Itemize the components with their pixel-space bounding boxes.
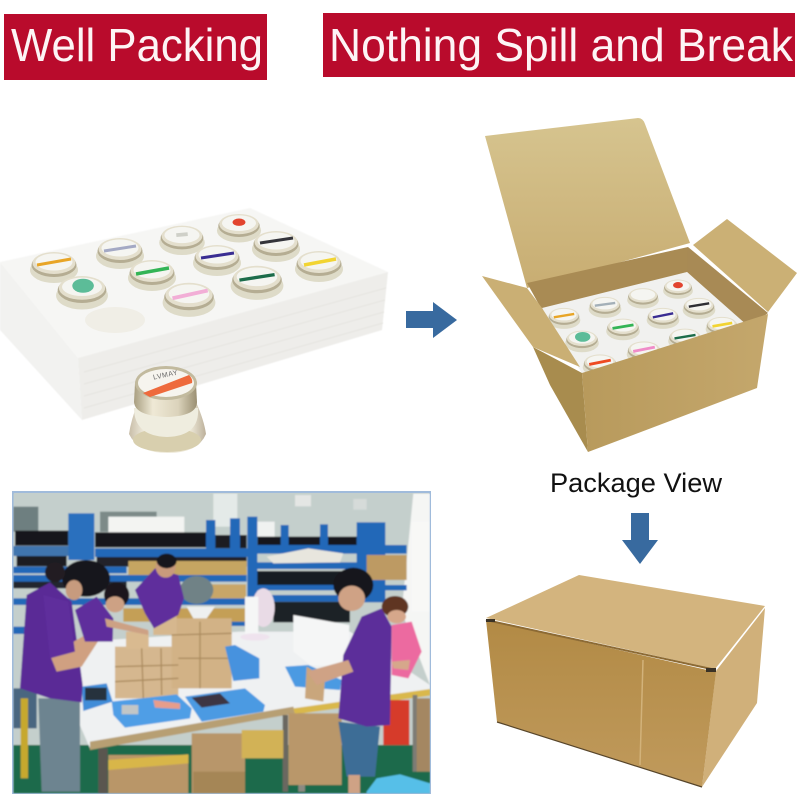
label: Package View: Package View [550, 468, 723, 498]
worker pink [392, 622, 422, 678]
box lid interior [485, 118, 690, 288]
background worker jeans [13, 688, 37, 728]
shelf cartons [128, 561, 247, 575]
blue shelf uprights [68, 513, 94, 560]
worker right [338, 722, 380, 777]
empty jar hole [85, 307, 145, 333]
tray jar red [217, 214, 261, 242]
box jar teal [565, 331, 599, 352]
inner right wall [687, 247, 768, 328]
tray jar purple [193, 245, 241, 276]
front outer wall [582, 314, 768, 452]
tray jar blue grey [96, 238, 144, 269]
blue stool [367, 774, 430, 793]
tray jar yellow [295, 251, 343, 282]
heading banner: Nothing Spill and Break: Nothing Spill and Break [329, 19, 794, 71]
box jar purple [647, 308, 679, 329]
box jar red orange [583, 354, 617, 377]
photo frame [13, 492, 430, 793]
foam tray body [0, 208, 388, 420]
tray jar pink [163, 283, 215, 317]
foam tray with jars [0, 208, 388, 420]
right flap [693, 219, 797, 312]
closed box right side [702, 608, 765, 787]
worker middle [75, 597, 113, 642]
large single jar [129, 366, 206, 453]
tray jar black [252, 231, 300, 262]
tray jar dark green [231, 266, 283, 300]
closed cardboard box [486, 575, 765, 787]
black jar rows [15, 531, 68, 546]
tray jar orange [30, 252, 78, 283]
metal cap [134, 383, 197, 417]
closed box top [486, 575, 765, 669]
box jar dark green [668, 329, 702, 350]
closed box front [486, 620, 716, 787]
tray jar teal [56, 276, 108, 310]
jar label [138, 369, 194, 397]
box jar grey [589, 297, 621, 318]
cartons under table [108, 755, 188, 793]
tray jar green [128, 260, 176, 291]
caution stripe [21, 698, 28, 778]
factory packing photo [13, 492, 430, 793]
small carton in hand [305, 667, 325, 702]
inner back wall [527, 247, 688, 310]
box jar green [606, 319, 640, 340]
right wall posters [412, 522, 430, 612]
corner mark right [706, 668, 716, 672]
closed box top edge [486, 620, 716, 670]
box jar red [663, 280, 693, 299]
tray jar white [159, 226, 205, 255]
arrow: right to open box [406, 302, 457, 338]
corner mark left [486, 619, 495, 622]
left outer side [533, 347, 588, 452]
worker back [135, 568, 184, 628]
blue trays [112, 694, 192, 728]
worker left [38, 698, 80, 792]
wall and floor [13, 493, 430, 793]
photo scene [13, 493, 430, 793]
stacked small boxes [115, 647, 178, 698]
desk fan [252, 588, 275, 627]
closed box seam [640, 660, 643, 765]
brand text: LVMAY [153, 369, 179, 382]
open cardboard box with jars [482, 118, 797, 452]
blue shelf beams [13, 546, 83, 556]
heading banner: Well Packing: Well Packing [11, 19, 263, 71]
box jar black [683, 298, 715, 319]
arrow: down to closed box [622, 513, 658, 564]
white foam floor [542, 272, 748, 375]
glass pot [129, 402, 206, 453]
left flap [482, 276, 580, 367]
white boxes on shelf [108, 517, 184, 533]
box jar white [627, 288, 659, 309]
closed box bottom edge [497, 722, 702, 787]
stacked papers [267, 548, 343, 563]
packing table [78, 632, 430, 748]
white paper sign [292, 614, 350, 632]
box jar yellow [706, 317, 738, 338]
box jar orange [548, 308, 580, 329]
box jar pink [627, 341, 661, 364]
